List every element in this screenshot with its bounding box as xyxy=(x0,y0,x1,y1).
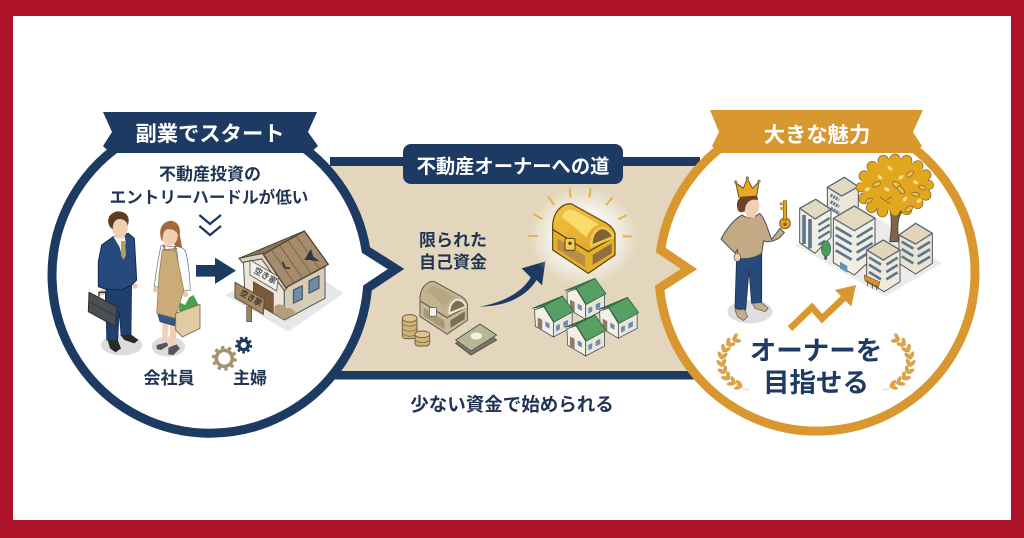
icon: vacant house: 空き家 xyxy=(252,265,279,287)
icon: gears xyxy=(213,338,251,369)
panel: big appeal circle xyxy=(660,110,975,431)
icon: office worker xyxy=(98,211,142,355)
icon: gold chest xyxy=(553,204,615,273)
heading: aim to be an owner: オーナーを xyxy=(750,336,882,366)
panel: road band xyxy=(330,144,700,415)
heading: low entry hurdle: エントリーハードルが低い xyxy=(110,187,308,207)
arrow: to vacant house xyxy=(196,258,236,284)
label: limited own funds xyxy=(419,231,487,272)
icon: right laurel xyxy=(883,331,917,393)
icon: briefcase xyxy=(88,292,117,327)
label: office worker: 会社員 xyxy=(144,369,194,388)
banner: big appeal xyxy=(710,110,923,153)
icon: gold key xyxy=(780,201,790,229)
building front xyxy=(864,240,900,292)
banner: big appeal: 大きな魅力 xyxy=(764,123,870,147)
building back xyxy=(827,177,858,215)
label: limited own funds: 限られた xyxy=(419,231,487,250)
road label xyxy=(403,144,623,184)
icon: double chevron xyxy=(199,215,221,235)
icon: glow rays xyxy=(528,188,632,236)
building left xyxy=(800,199,831,253)
icon: green houses xyxy=(533,278,639,356)
icon: coins xyxy=(402,315,430,346)
heading: aim to be an owner: 目指せる xyxy=(763,368,869,398)
icon: shopping bag xyxy=(176,292,200,337)
icon: left laurel xyxy=(715,331,749,393)
icon: banknotes xyxy=(456,324,497,355)
icon: office worker and homemaker xyxy=(88,211,200,357)
icon: golden tree xyxy=(856,154,934,242)
banner: side job xyxy=(103,112,318,153)
heading: low entry hurdle: 不動産投資の xyxy=(159,165,261,184)
banner: side job: 副業でスタート xyxy=(135,122,285,146)
building center xyxy=(833,206,875,275)
icon: homemaker xyxy=(152,221,190,357)
caption: small funds: 少ない資金で始められる xyxy=(410,394,614,415)
heading: aim to be an owner xyxy=(750,336,882,398)
panel: side job start circle xyxy=(52,112,396,433)
icon: vacant house xyxy=(225,231,343,332)
heading: low entry hurdle xyxy=(110,165,308,207)
label: homemaker: 主婦 xyxy=(233,369,267,388)
building right xyxy=(899,223,932,274)
icon: apartment buildings and tree xyxy=(795,154,942,297)
arrow: curved up to gold chest xyxy=(479,261,545,307)
icon: vacant house: 空き家 xyxy=(238,287,264,308)
road label: 不動産オーナーへの道 xyxy=(417,156,609,178)
label: limited own funds: 自己資金 xyxy=(419,252,487,272)
icon: small chest xyxy=(420,281,467,334)
icon: crown xyxy=(734,176,761,197)
funds to treasure scene xyxy=(402,187,639,356)
icon: small tree xyxy=(821,241,831,260)
icon: glow xyxy=(528,187,638,287)
icon: owner with crown xyxy=(721,176,790,323)
arrow: growth xyxy=(790,285,856,329)
